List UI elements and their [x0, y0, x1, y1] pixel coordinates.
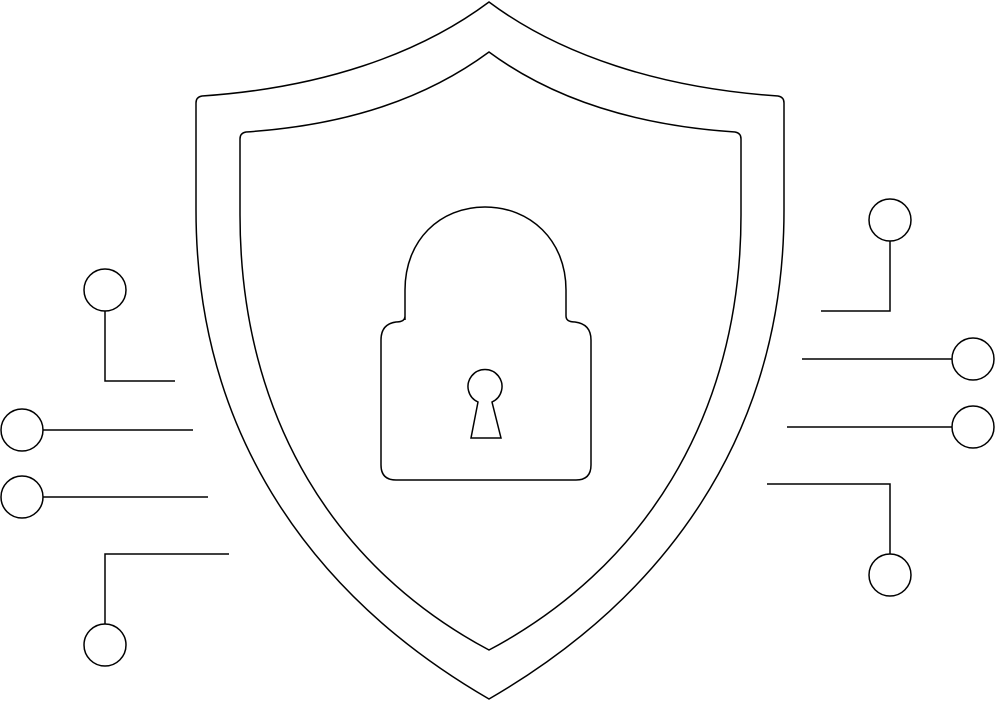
- keyhole: [468, 370, 502, 438]
- circuits right: [767, 199, 994, 596]
- icon: padlock: [381, 207, 591, 480]
- shield outer: [196, 2, 784, 699]
- circuits left: [1, 269, 229, 666]
- shield inner: [240, 52, 741, 650]
